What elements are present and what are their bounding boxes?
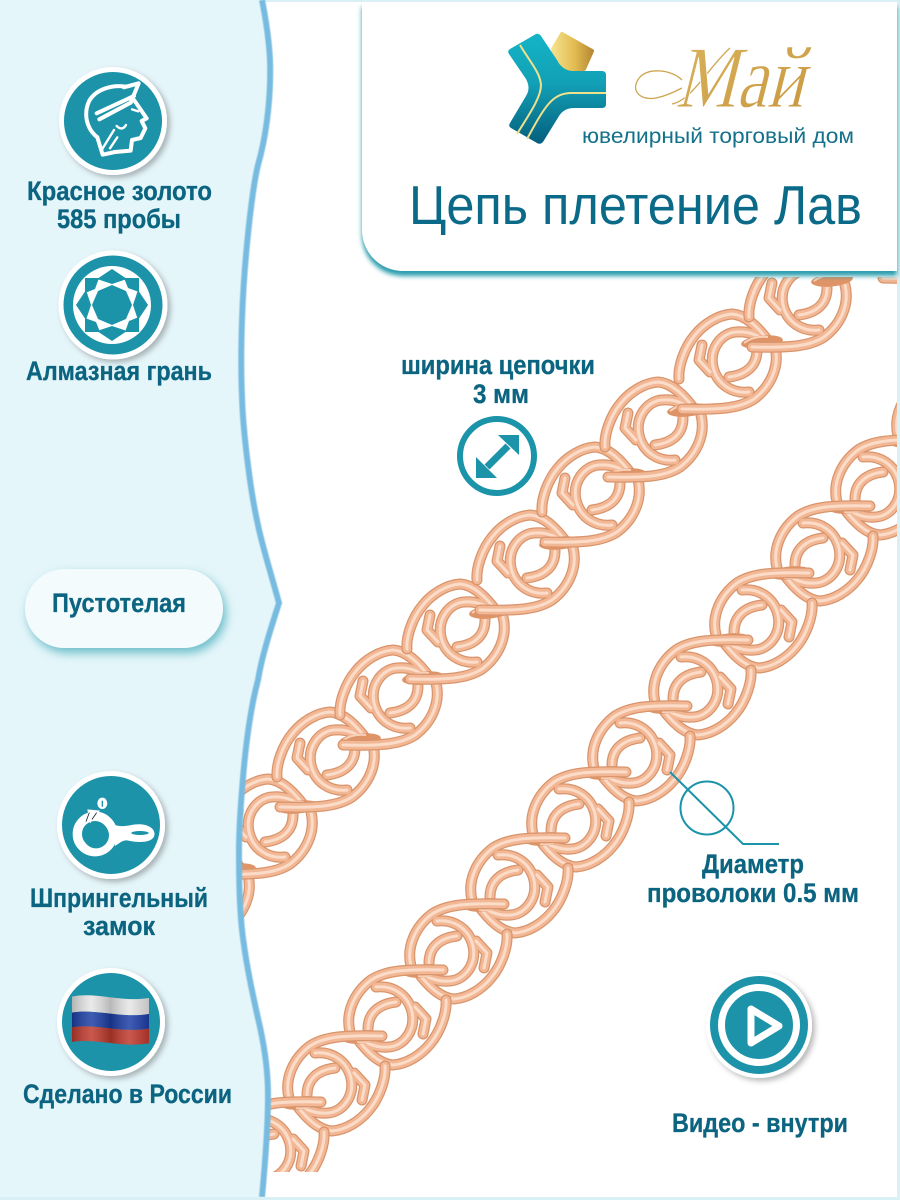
header panel — [362, 2, 897, 271]
upper chain strand — [241, 277, 897, 918]
label: red gold 585 — [27, 176, 212, 234]
label: chain width — [401, 350, 595, 409]
logo wordmark — [636, 29, 822, 127]
label: chain width: 3 мм — [473, 379, 529, 409]
video callout — [672, 974, 848, 1138]
label: spring clasp: Шпрингельный — [30, 883, 208, 913]
icon: head in helmet — [62, 70, 164, 172]
label: red gold 585: 585 пробы — [57, 204, 181, 234]
lower chain strand — [268, 402, 897, 1172]
icon: diagonal double arrow — [460, 419, 534, 493]
label: wire diameter: Диаметр — [702, 849, 804, 879]
feature: made in Russia — [23, 970, 232, 1109]
label: red gold 585: Красное золото — [27, 176, 212, 206]
icon: spring ring clasp — [60, 774, 162, 876]
icon: diameter symbol with leader line — [670, 772, 779, 844]
label: wire diameter — [647, 849, 859, 908]
logo tagline: ювелирный торговый дом — [582, 124, 854, 148]
left wavy panel — [0, 0, 279, 1200]
feature: diamond facet — [26, 253, 212, 386]
label: video inside: Видео - внутри — [672, 1108, 848, 1138]
feature: spring clasp — [30, 774, 208, 941]
pill: hollow: Пустотелая — [52, 588, 186, 618]
logo mark — [508, 34, 606, 144]
pill: hollow — [25, 569, 223, 648]
chain photo: two diagonal strands — [241, 277, 897, 1172]
logo wordmark: Май — [670, 29, 822, 127]
feature: red gold — [27, 70, 212, 234]
label: wire diameter: проволоки 0.5 мм — [647, 878, 859, 908]
bottom strip over panel — [0, 1197, 900, 1200]
label: spring clasp — [30, 883, 208, 941]
label: chain width: ширина цепочки — [401, 350, 595, 380]
label: made in Russia: Сделано в России — [23, 1079, 232, 1109]
chain width callout — [401, 350, 595, 493]
title: Цепь плетение Лав — [409, 174, 862, 236]
label: spring clasp: замок — [83, 911, 156, 941]
icon: play button — [708, 974, 810, 1076]
wire diameter callout — [647, 772, 859, 908]
icon: Russian flag — [60, 970, 162, 1074]
icon: diamond cut — [61, 253, 165, 357]
label: diamond facet: Алмазная грань — [26, 356, 212, 386]
